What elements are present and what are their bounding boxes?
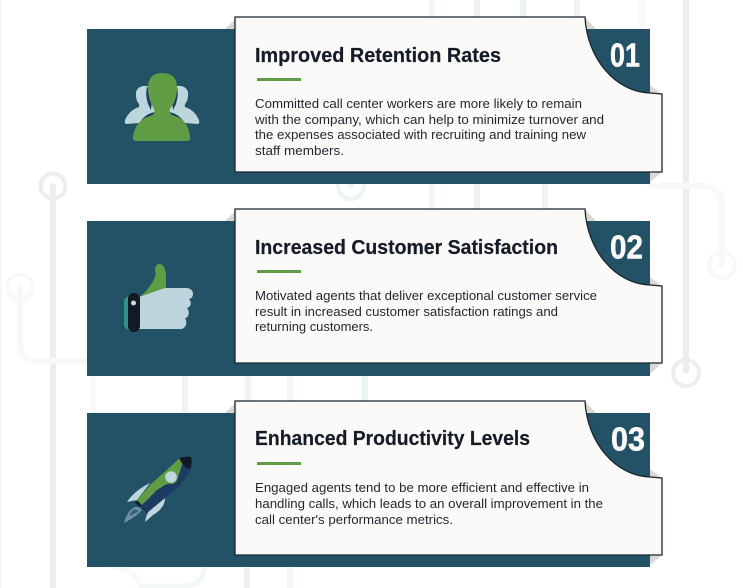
card: [235, 17, 662, 172]
body text: [254, 97, 604, 158]
icon: group of people: [125, 73, 199, 141]
body text: Motivated agents that deliver exceptional customer service: [255, 289, 597, 303]
card: [235, 209, 662, 363]
card: [235, 401, 662, 555]
panel: improved retention rates: [87, 17, 662, 184]
accent rule: [257, 462, 301, 465]
paper folds: [225, 17, 662, 182]
body text: staff members.: [255, 144, 344, 158]
icon: thumbs up: [124, 264, 193, 332]
paper folds: [225, 209, 662, 374]
panel background band: [87, 221, 650, 376]
panel: enhanced productivity levels: [87, 401, 662, 567]
heading: Increased Customer Satisfaction: [255, 237, 558, 259]
heading: Enhanced Productivity Levels: [255, 428, 530, 450]
body text: call center's performance metrics.: [255, 513, 453, 527]
heading: Improved Retention Rates: [255, 45, 501, 67]
icon: rocket: [124, 457, 192, 523]
body text: with the company, which can help to minimize turnover and: [254, 113, 604, 127]
body text: handling calls, which leads to an overall improvement in the: [255, 497, 603, 511]
body text: result in increased customer satisfaction ratings and: [255, 305, 558, 319]
panel background band: [87, 413, 650, 567]
body text: Committed call center workers are more likely to remain: [255, 97, 582, 111]
body text: [255, 481, 603, 527]
accent rule: [257, 270, 301, 273]
body text: Engaged agents tend to be more efficient and effective in: [255, 481, 589, 495]
number: 03: [611, 420, 645, 458]
body text: [255, 289, 597, 334]
body text: returning customers.: [255, 320, 373, 334]
number: 01: [610, 36, 640, 74]
paper folds: [225, 401, 662, 565]
body text: the expenses associated with recruiting and training new: [255, 128, 587, 142]
number: 02: [610, 228, 643, 266]
panel: increased customer satisfaction: [87, 209, 662, 376]
accent rule: [257, 78, 301, 81]
panel background band: [87, 29, 650, 184]
